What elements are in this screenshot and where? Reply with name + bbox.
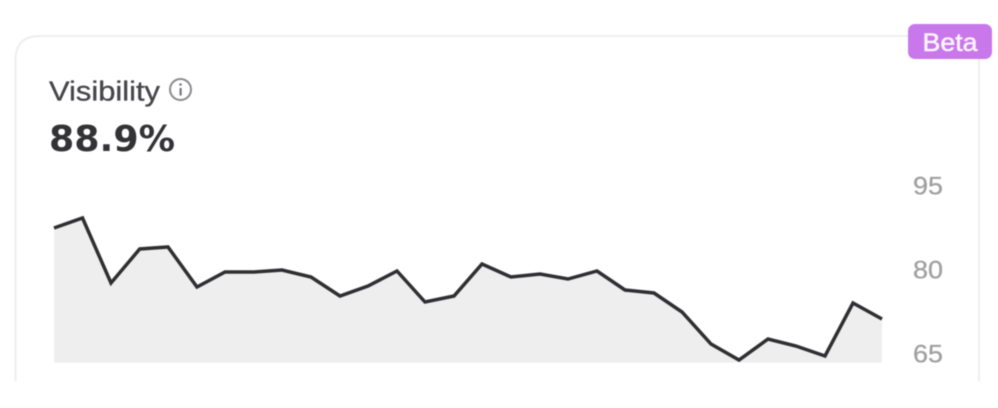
icon: info: [170, 79, 191, 100]
badge: Beta: [908, 24, 992, 59]
badge: Beta: Beta: [922, 29, 978, 57]
axis label 80: 80: [913, 256, 943, 284]
y axis labels: [913, 172, 943, 368]
axis label 95: 95: [913, 172, 943, 200]
metric value: 88.9%: 88.9%: [49, 119, 175, 160]
chart area fill: [54, 218, 882, 362]
axis label 65: 65: [913, 340, 943, 368]
area chart: visibility trend: [54, 218, 882, 362]
heading: Visibility: Visibility: [49, 76, 160, 106]
chart line: [54, 218, 882, 360]
